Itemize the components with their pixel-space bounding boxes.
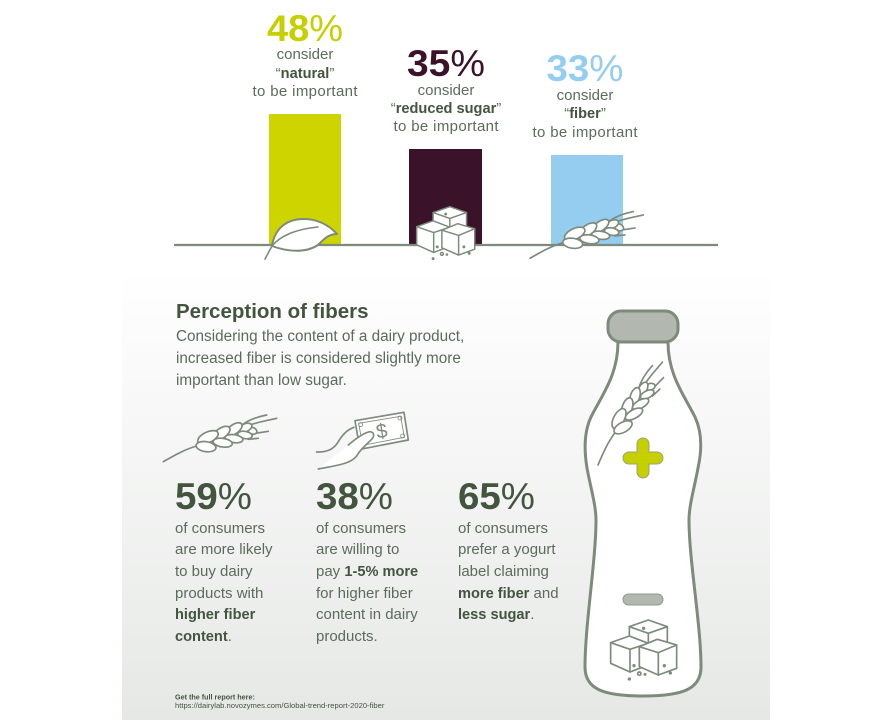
bottle body — [585, 342, 701, 696]
icon: hand holding money: $ — [375, 420, 389, 443]
stat: 35% reduced sugar — [391, 43, 501, 135]
stat: 59%: content. — [175, 628, 232, 645]
stat: 59%: are more likely — [175, 541, 273, 558]
stat: 48% natural: to be important — [252, 83, 358, 100]
stat: 65%: label claiming — [458, 563, 549, 580]
stat: 38%: 38% — [316, 476, 393, 517]
stat: 65%: less sugar. — [458, 606, 534, 623]
stat: 33% fiber: to be important — [532, 124, 638, 141]
stat: 33% fiber: consider — [557, 87, 613, 104]
stat: 35% reduced sugar: consider — [418, 82, 474, 99]
stat: 59%: to buy dairy — [175, 563, 253, 580]
icon: minus — [623, 594, 663, 605]
stat: 35% reduced sugar: 35% — [407, 43, 485, 84]
icon: sugar cubes in bottle — [611, 620, 677, 680]
bar: reduced sugar — [409, 149, 482, 245]
panel: gradient background — [122, 268, 770, 720]
footer: report link — [175, 692, 385, 710]
text block: intro: Considering the content of a dairy product, — [176, 328, 464, 345]
heading: perception of fibers: Perception of fibers — [176, 300, 369, 323]
icon: sugar cubes — [417, 207, 475, 259]
stat: 65% — [458, 476, 559, 623]
stat: 48% natural — [252, 8, 358, 100]
stat: 35% reduced sugar: “reduced sugar” — [391, 100, 501, 117]
stat: 59% — [175, 476, 273, 645]
stat: 48% natural: 48% — [267, 8, 343, 49]
bottle cap — [608, 311, 678, 342]
stat: 38%: of consumers — [316, 520, 406, 537]
stat: 48% natural: consider — [277, 46, 333, 63]
stat: 33% fiber: 33% — [546, 48, 624, 89]
stat: 65%: prefer a yogurt — [458, 541, 556, 558]
text block: intro: increased fiber is considered slightly more — [176, 350, 461, 367]
stat: 65%: 65% — [458, 476, 535, 517]
stat: 48% natural: “natural” — [276, 65, 334, 82]
stat: 59%: products with — [175, 585, 263, 602]
text block: intro: important than low sugar. — [176, 372, 347, 389]
stat: 38%: for higher fiber — [316, 585, 413, 602]
bar: fiber — [551, 155, 623, 245]
stat: 59%: of consumers — [175, 520, 265, 537]
stat: 65%: of consumers — [458, 520, 548, 537]
chart baseline — [174, 244, 718, 246]
stat: 59%: higher fiber — [175, 607, 256, 623]
stat: 33% fiber — [532, 48, 638, 141]
stat: 59%: 59% — [175, 476, 252, 517]
icon: hand holding money — [317, 412, 408, 469]
icon: wheat in bottle — [570, 359, 689, 465]
footer: report link: https://dairylab.novozymes.com/Global-trend-report-2020-fiber — [175, 701, 385, 710]
illustration: milk bottle — [570, 311, 701, 696]
stat: 35% reduced sugar: to be important — [394, 118, 499, 135]
stat: 65%: more fiber and — [458, 585, 559, 602]
bar chart: important claims — [174, 114, 718, 245]
stat: 33% fiber: “fiber” — [564, 105, 606, 122]
stat: 38% — [316, 476, 418, 645]
icon: plus — [623, 438, 663, 478]
icon: wheat — [163, 415, 277, 462]
stat: 38%: products. — [316, 628, 378, 645]
icon: wheat on baseline — [530, 212, 643, 258]
text block: intro — [176, 328, 464, 389]
stat: 38%: are willing to — [316, 541, 399, 558]
stat: 38%: content in dairy — [316, 606, 418, 623]
footer: report link: Get the full report here: — [175, 692, 255, 702]
stat: 38%: pay 1-5% more — [316, 563, 418, 580]
bar: natural — [269, 114, 341, 245]
icon: leaf — [265, 219, 337, 259]
